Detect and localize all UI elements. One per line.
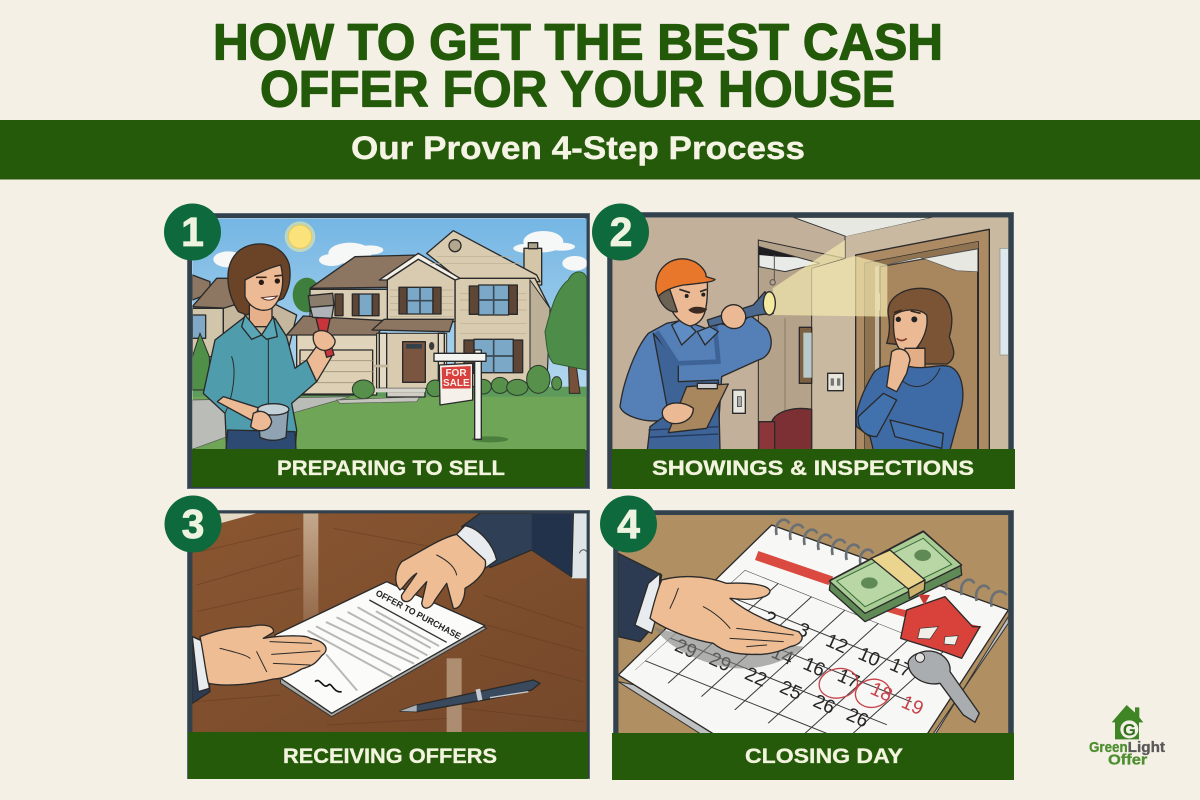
illustration: offer to purchase on a table — [192, 513, 587, 733]
subtitle banner: Our Proven 4-Step Process — [351, 130, 805, 166]
illustration: inspector and homeowner — [612, 217, 1008, 450]
calendar dates: 17 — [886, 654, 915, 682]
panel: step 1 preparing to sell — [164, 204, 590, 488]
suit sleeve — [457, 513, 587, 578]
flashlight — [707, 292, 773, 327]
caption: closing day: CLOSING DAY — [745, 745, 903, 768]
sofa — [771, 408, 812, 449]
step number 1: 1 — [181, 209, 204, 255]
calendar dates: 26 — [810, 691, 838, 719]
icon: house with G: G — [1123, 720, 1136, 739]
step number 2 — [592, 204, 649, 260]
shadow under hand — [653, 627, 803, 668]
calendar dates: 26 — [843, 704, 871, 732]
calendar dates: 16 — [800, 654, 828, 682]
panel: step 4 closing day — [600, 496, 1014, 780]
shrubs — [352, 365, 562, 399]
logo: GreenLight Offer: Light — [1128, 740, 1165, 756]
logo: GreenLight Offer — [1089, 705, 1165, 769]
caption: preparing to sell — [192, 449, 585, 487]
offer document: OFFER TO PURCHASE — [374, 588, 463, 641]
logo: GreenLight Offer: Green — [1089, 740, 1128, 756]
for sale sign — [434, 350, 508, 442]
panel: step 3 receiving offers — [164, 496, 590, 779]
hand offering — [396, 534, 486, 608]
step number 4 — [600, 496, 657, 552]
paint can — [257, 408, 288, 440]
caption: closing day — [612, 733, 1014, 780]
homeowner — [203, 244, 335, 450]
illustration: house and homeowner — [192, 218, 588, 450]
offer document — [275, 582, 487, 717]
neighbouring house — [192, 275, 297, 390]
house keychain — [901, 594, 980, 658]
calendar dates: 29 — [671, 635, 700, 663]
spiral binding — [776, 520, 1007, 607]
grass — [192, 393, 587, 450]
panel: step 2 showings and inspections — [592, 204, 1015, 489]
trees behind — [293, 278, 321, 312]
hallway opening — [758, 240, 845, 450]
calendar dates: 3 — [794, 619, 812, 643]
caption: showings and inspections — [612, 449, 1015, 489]
homeowner — [856, 288, 963, 450]
calendar dates: 2 — [761, 608, 779, 631]
subtitle banner — [0, 120, 1200, 180]
calendar — [618, 518, 1008, 733]
calendar dates: 12 — [822, 630, 851, 658]
table reflections — [303, 513, 318, 633]
title: HOW TO GET THE BEST CASH — [213, 14, 943, 70]
key — [908, 651, 979, 722]
calendar dates: 14 — [768, 642, 797, 670]
calendar dates: 17 — [834, 665, 862, 693]
switch plates — [733, 390, 745, 413]
caption: receiving offers — [188, 732, 588, 779]
title — [213, 14, 943, 118]
calendar dates: 10 — [855, 644, 883, 672]
calendar dates: 29 — [706, 649, 734, 677]
house — [287, 231, 550, 395]
door frame — [856, 229, 989, 450]
hand receiving — [192, 625, 326, 703]
illustration: calendar, cash, and keys — [618, 515, 1008, 733]
caption: showings and inspections: SHOWINGS & INSPECTIONS — [652, 457, 974, 480]
calendar dates: 18 — [867, 679, 895, 707]
step number 1 — [164, 204, 221, 260]
step number 2: 2 — [610, 209, 632, 255]
for sale sign: SALE — [443, 378, 470, 389]
logo: GreenLight Offer: Offer — [1108, 753, 1148, 769]
caption: receiving offers: RECEIVING OFFERS — [283, 745, 497, 768]
calendar dates: 22 — [741, 664, 770, 692]
step number 3 — [164, 496, 222, 552]
pen — [400, 680, 540, 712]
hand on calendar — [618, 553, 802, 654]
clipboard — [668, 384, 728, 433]
inspector — [620, 259, 775, 450]
title: OFFER FOR YOUR HOUSE — [260, 60, 895, 118]
driveway — [192, 397, 350, 448]
flashlight beam — [773, 240, 887, 317]
tree right — [545, 272, 587, 393]
step number 4: 4 — [617, 501, 640, 547]
caption: preparing to sell: PREPARING TO SELL — [277, 457, 505, 480]
cash stack — [829, 531, 962, 622]
step number 3: 3 — [182, 501, 204, 547]
calendar dates: 19 — [898, 692, 926, 720]
for sale sign: FOR — [445, 368, 467, 379]
calendar dates — [671, 608, 926, 732]
calendar dates: 25 — [776, 677, 805, 705]
icon: sun — [285, 221, 315, 252]
paint brush — [316, 316, 334, 357]
